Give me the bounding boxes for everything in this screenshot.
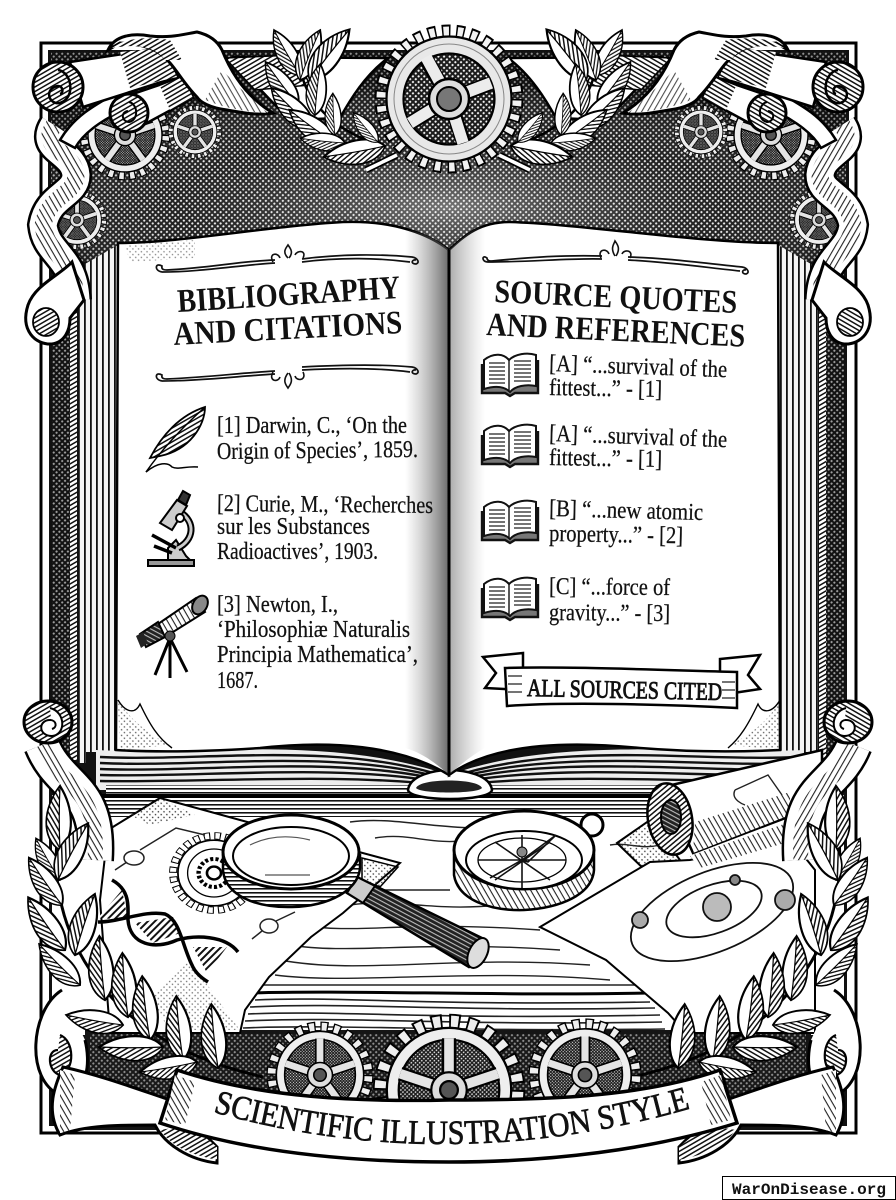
quote A repeated (549, 421, 728, 473)
spine clasp (408, 770, 492, 799)
compass (454, 811, 603, 910)
citation 1: [1] Darwin, C., ‘On the (217, 413, 407, 439)
right tail (679, 1067, 844, 1163)
gear schematic (173, 836, 255, 910)
quote B: [B] “...new atomic (549, 496, 703, 526)
quote B: property...” - [2] (549, 521, 683, 549)
citation 3: ‘Philosophiæ Naturalis (217, 617, 410, 643)
quote A: fittest...” - [1] (549, 375, 662, 403)
icon: microscope (148, 491, 194, 566)
citation 2: sur les Substances (217, 514, 370, 540)
top divider left (156, 245, 418, 272)
quote A repeated: [A] “...survival of the (549, 421, 728, 453)
open book cover and page edges (70, 245, 826, 767)
left page (116, 222, 449, 775)
halftone background (51, 52, 846, 790)
page stack (86, 749, 810, 798)
quote A repeated: fittest...” - [1] (549, 445, 662, 473)
top ribbon tail (234, 57, 388, 120)
upper curl (26, 262, 84, 344)
heading: source quotes and references (486, 274, 746, 355)
banner title: SCIENTIFIC ILLUSTRATION STYLE (214, 1087, 690, 1145)
citation 2: Radioactives’, 1903. (217, 539, 378, 565)
icon: book 1 (482, 354, 538, 396)
citation 3: 1687. (217, 668, 258, 694)
citation 1 (217, 413, 418, 465)
icon: book 3 (482, 501, 538, 543)
citation 2 (217, 491, 433, 565)
side ribbon (43, 125, 76, 300)
bottom side scroll (36, 990, 87, 1095)
main band (160, 1070, 737, 1162)
main scroll big (70, 48, 177, 107)
DNA helix (98, 880, 238, 982)
small ribbon: all sources cited (483, 653, 760, 708)
quote A (549, 351, 728, 403)
lower side scroll ribbon (42, 745, 95, 860)
heading: bibliography and citations: BIBLIOGRAPHY (176, 270, 401, 320)
citation 3: Principia Mathematica’, (217, 642, 418, 668)
top divider right (483, 241, 748, 274)
arc ribbon under scrolls (60, 88, 135, 148)
left tail (52, 1067, 217, 1163)
icon: feather quill (146, 407, 205, 472)
heading: source quotes and references: AND REFERENCES (486, 307, 746, 355)
second scroll (130, 77, 193, 124)
mirrored right decoration (499, 21, 879, 1095)
heading: source quotes and references: SOURCE QUOTES (494, 274, 738, 321)
left paper with schematic and DNA (98, 798, 400, 1033)
magnifying glass (223, 815, 493, 971)
watermark: WarOnDisease.org (732, 1181, 886, 1199)
curled main ribbon (108, 32, 273, 114)
icon: book 2 (482, 425, 538, 467)
quote B (549, 496, 703, 549)
quote C: gravity...” - [3] (549, 600, 670, 627)
bottom divider left (156, 365, 418, 388)
icon: telescope (136, 593, 211, 678)
right page (449, 222, 780, 775)
orbit diagram (617, 843, 807, 981)
circuit nodes (115, 828, 295, 939)
small ribbon: all sources cited: ALL SOURCES CITED (527, 675, 722, 706)
laurel branch (17, 786, 263, 1084)
right paper with orbit diagram (540, 820, 815, 1033)
left decoration: ribbons, scrolls, small gears and laurels (17, 21, 397, 1095)
quote C (549, 574, 670, 627)
quote C: [C] “...force of (549, 574, 670, 601)
watermark (722, 1176, 896, 1200)
rolled scroll on desk (642, 750, 822, 858)
top laurel branch (257, 21, 397, 170)
citation 1: Origin of Species’, 1859. (217, 437, 418, 465)
citation 3 (217, 592, 418, 694)
heading: bibliography and citations (173, 270, 403, 353)
bottom gears (266, 1014, 642, 1099)
quote A: [A] “...survival of the (549, 351, 728, 383)
heading: bibliography and citations: AND CITATIONS (173, 305, 403, 353)
small gears (50, 94, 219, 247)
desk (52, 795, 844, 1130)
top gear (381, 31, 517, 167)
bottom banner (50, 1065, 845, 1165)
citation 2: [2] Curie, M., ‘Recherches (217, 491, 433, 519)
icon: book 4 (482, 578, 538, 620)
citation 3: [3] Newton, I., (217, 592, 338, 618)
